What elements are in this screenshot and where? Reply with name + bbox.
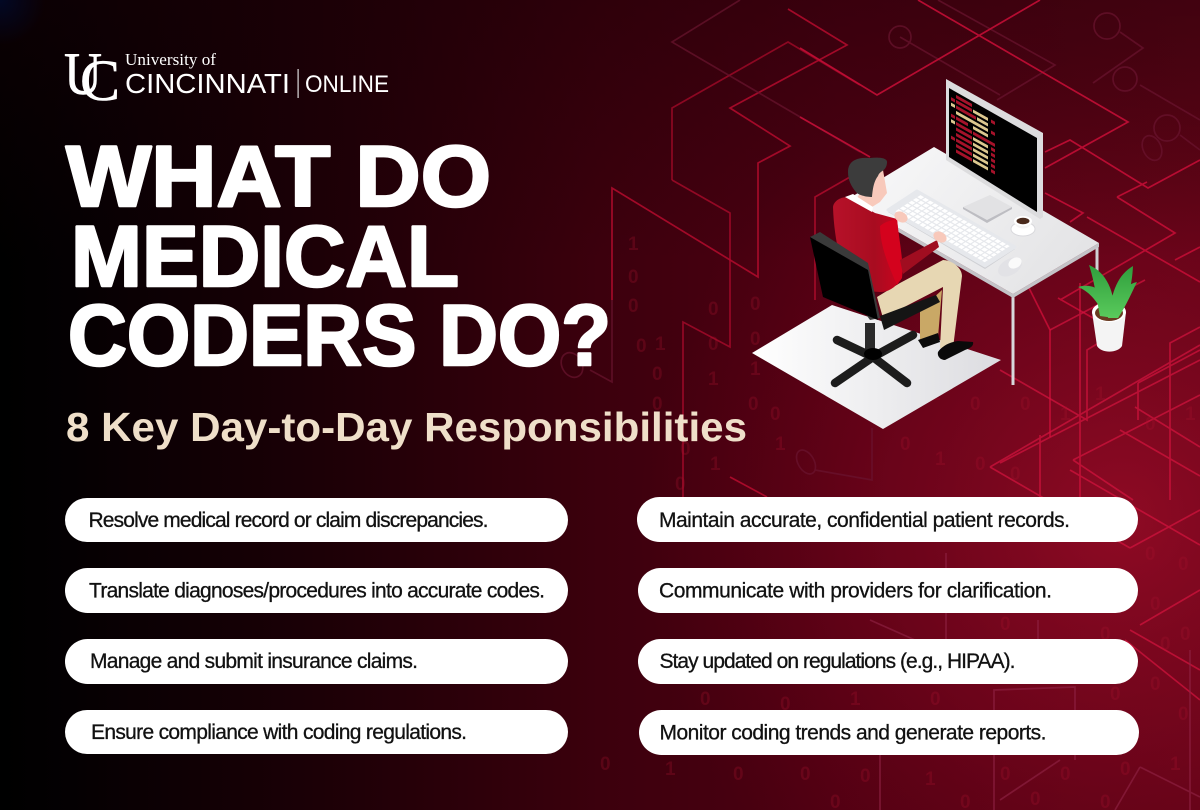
binary digit streams: 0 (1178, 704, 1189, 725)
binary digit streams: 0 (708, 299, 719, 320)
title: WHAT DO (66, 129, 491, 225)
binary digit streams: 1 (935, 449, 946, 470)
item: monitor trends (639, 710, 1139, 755)
binary digit streams: 0 (1000, 614, 1011, 635)
binary digit streams: 0 (748, 394, 759, 415)
person (833, 158, 973, 360)
back leg (920, 290, 942, 340)
binary digit streams: 0 (700, 689, 711, 710)
item: communicate with providers (638, 568, 1138, 613)
binary digit streams: 0 (675, 474, 686, 495)
binary digit streams: 0 (900, 434, 911, 455)
binary digit streams: 0 (1030, 789, 1041, 810)
on-screen code lines (951, 92, 995, 174)
binary digit streams: 0 (1150, 594, 1161, 615)
item: manage claims (65, 639, 568, 684)
item: manage claims: Manage and submit insurance claims. (90, 650, 418, 673)
binary digit streams: 1 (655, 334, 666, 355)
item: translate diagnoses: Translate diagnoses/procedures into accurate codes. (89, 580, 545, 602)
binary digit streams: 0 (1100, 624, 1111, 645)
binary digit streams: 1 (628, 234, 639, 255)
binary digit streams: 1 (708, 369, 719, 390)
desk (848, 147, 1099, 385)
binary digit streams: 0 (600, 754, 611, 775)
binary digit streams: 0 (1020, 394, 1031, 415)
item: ensure compliance: Ensure compliance with coding regulations. (91, 721, 467, 744)
item: stay updated: Stay updated on regulations (e.g., HIPAA). (660, 650, 1016, 673)
binary digit streams: 1 (1095, 384, 1106, 405)
hands (892, 209, 910, 225)
binary digit streams: 1 (775, 434, 786, 455)
hair (848, 158, 887, 197)
item: monitor trends: Monitor coding trends and generate reports. (660, 722, 1046, 744)
binary digit streams: 0 (1010, 464, 1021, 485)
circuit line pattern (557, 0, 1200, 810)
binary digit streams: 0 (628, 267, 639, 288)
binary digit streams: 0 (1150, 674, 1161, 695)
sweater (833, 197, 901, 292)
item: stay updated (638, 639, 1138, 684)
logo monogram UC: U (64, 41, 102, 107)
keyboard (888, 191, 1015, 269)
binary digit streams: 1 (1185, 404, 1196, 425)
floor mat (752, 305, 1001, 429)
binary digit streams: 0 (628, 296, 639, 317)
item: resolve discrepancies: Resolve medical record or claim discrepancies. (88, 509, 488, 532)
binary digit streams: 0 (860, 766, 871, 787)
subtitle: 8 Key Day-to-Day Responsibilities (66, 404, 747, 450)
item: maintain records: Maintain accurate, confidential patient records. (659, 509, 1070, 532)
collar (845, 194, 873, 212)
binary digit streams: 0 (652, 364, 663, 385)
binary digit streams: 1 (750, 359, 761, 380)
binary digit streams: 1 (850, 689, 861, 710)
binary digit streams: 0 (733, 764, 744, 785)
binary digit streams: 1 (925, 769, 936, 790)
binary digit streams: 0 (1110, 684, 1121, 705)
binary digit streams: 0 (1145, 414, 1156, 435)
binary digit streams: 1 (930, 384, 941, 405)
binary digit streams: 0 (1178, 554, 1189, 575)
binary digit streams: 0 (930, 689, 941, 710)
binary digit streams: 0 (652, 394, 663, 415)
logo: University of Cincinnati Online (64, 41, 389, 113)
title: MEDICAL (71, 209, 459, 305)
monitor (946, 79, 1043, 223)
binary digit streams: 0 (1145, 544, 1156, 565)
binary digit streams: 0 (680, 439, 691, 460)
binary digit streams: 0 (1160, 634, 1171, 655)
front leg (877, 260, 962, 348)
binary digit streams: 0 (770, 404, 781, 425)
binary digit streams: 0 (975, 454, 986, 475)
potted plant (1078, 265, 1137, 352)
binary digit streams: 0 (800, 764, 811, 785)
binary digit streams: 1 (1170, 754, 1181, 775)
left column responsibilities (65, 498, 568, 754)
binary digit streams: 0 (750, 329, 761, 350)
item: resolve discrepancies (65, 498, 568, 542)
item: ensure compliance (65, 710, 568, 754)
right column responsibilities (637, 497, 1139, 755)
office chair (810, 232, 940, 383)
binary digit streams: 0 (1120, 759, 1131, 780)
binary digit streams: 0 (636, 336, 647, 357)
title: CODERS DO? (68, 288, 611, 384)
item: maintain records (637, 497, 1138, 542)
binary digit streams: 0 (780, 694, 791, 715)
logo wordmark (125, 50, 389, 99)
mouse (995, 254, 1025, 280)
binary digit streams: 0 (1000, 764, 1011, 785)
illustration: medical coder at desk (752, 79, 1137, 429)
logo wordmark: University of (125, 50, 216, 69)
binary digit streams: 1 (710, 454, 721, 475)
title (66, 129, 611, 384)
logo monogram UC: C (80, 48, 120, 113)
logo wordmark: ONLINE (305, 71, 389, 98)
binary digit streams: 1 (665, 759, 676, 780)
item: communicate with providers: Communicate with providers for clarification. (659, 580, 1052, 602)
binary digit streams: 1 (1060, 404, 1071, 425)
item: translate diagnoses (65, 568, 568, 613)
binary digit streams: 0 (970, 394, 981, 415)
coffee cup (1011, 216, 1035, 236)
binary digit streams: 0 (750, 294, 761, 315)
binary digit streams: 0 (1060, 764, 1071, 785)
neck and face (857, 170, 887, 207)
logo wordmark: CINCINNATI (125, 68, 290, 99)
binary digit streams (600, 234, 1196, 810)
binary digit streams: 0 (1180, 624, 1191, 645)
binary digit streams: 0 (708, 334, 719, 355)
